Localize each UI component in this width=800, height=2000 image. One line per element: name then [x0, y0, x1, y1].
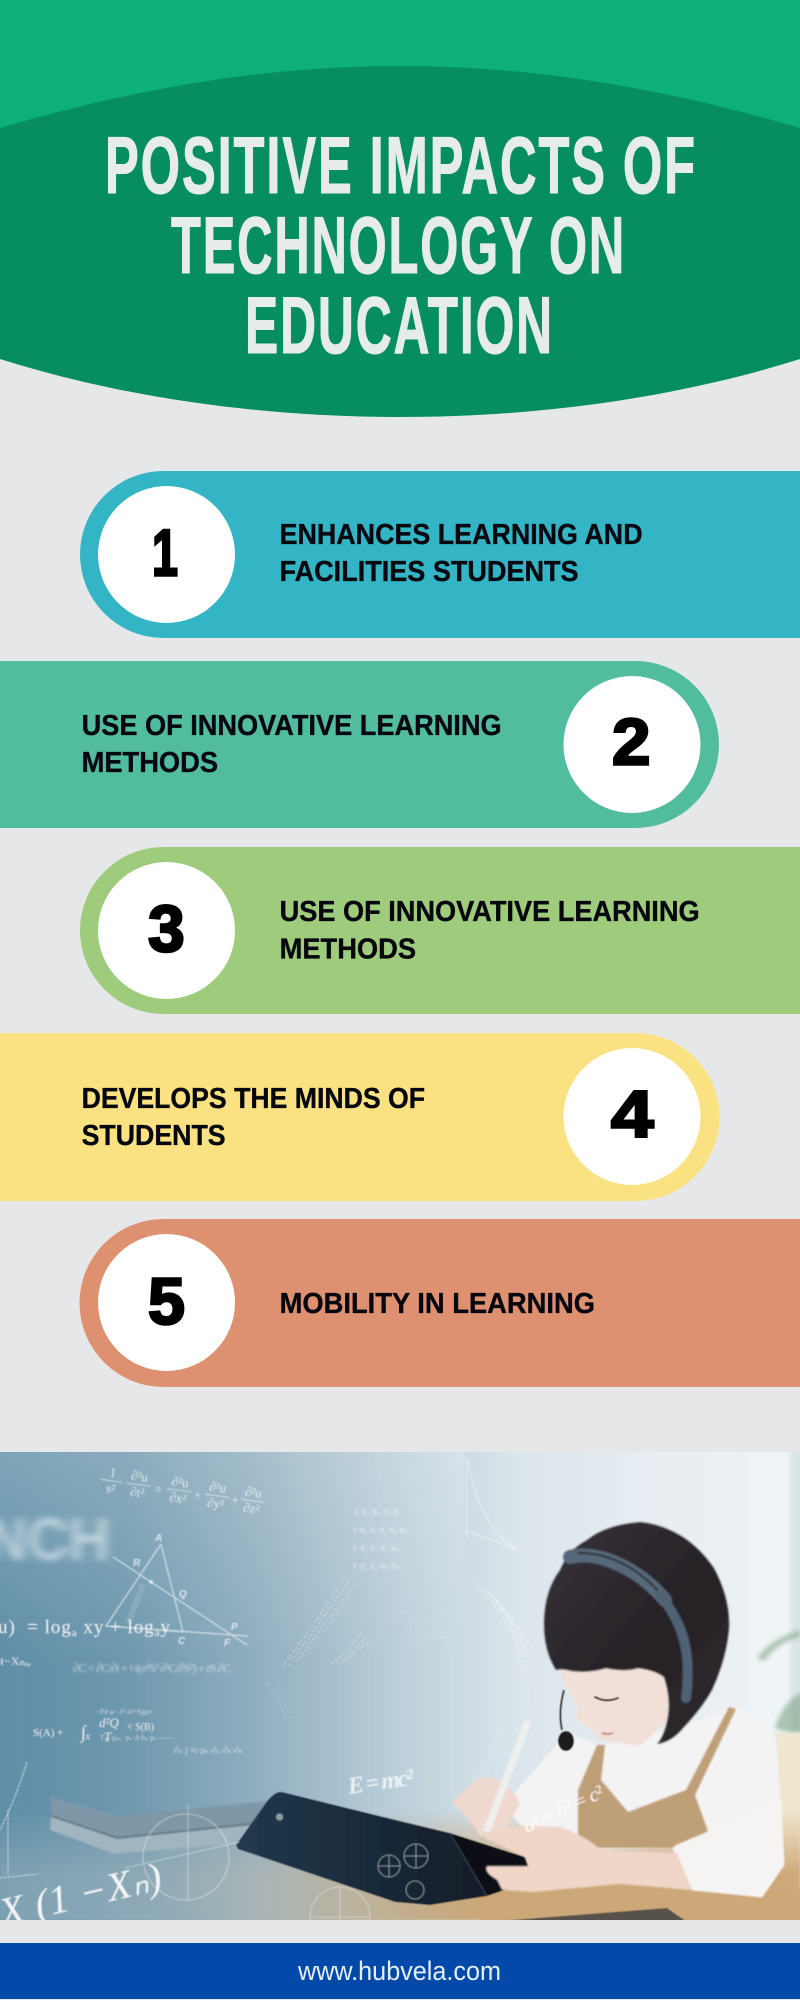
maths overlay: triangle diagram: A [154, 1533, 162, 1544]
item 5 panel: MOBILITY IN LEARNING [280, 1288, 595, 1320]
item 2 panel [0, 661, 719, 828]
maths overlay: integral formula: < S(B) [127, 1722, 154, 1733]
girl torso and sleeves [505, 1706, 784, 1897]
item 3 panel: 3 [148, 892, 185, 966]
tablet case [236, 1792, 534, 1905]
maths overlay: triangle diagram: P [231, 1622, 238, 1633]
maths overlay: small formula rows: Y·θ₁·Xᵢ·θ₁·Xₙ·θᵤ [352, 1526, 407, 1535]
girl face [561, 1668, 670, 1746]
plant [757, 1630, 800, 1732]
maths overlay: wave equation: ∂t² [129, 1484, 145, 1501]
maths overlay: integral formula: S(A) + [33, 1727, 63, 1739]
maths overlay: wave equation: ∂y² [206, 1494, 225, 1512]
maths overlay: small formula rows: ∂C = ∂C/∂t + ½(σ²S² ∂²C/∂S²) + rS ∂C [73, 1661, 231, 1675]
particle swarms [267, 1578, 532, 1785]
maths overlay: wave equation: ∂z² [242, 1500, 260, 1517]
maths overlay: integral formula [33, 1715, 154, 1744]
maths overlay: wave equation: 1 [109, 1465, 117, 1480]
header banner [0, 0, 800, 417]
title: EDUCATION [245, 281, 554, 371]
item 5 panel [80, 1219, 800, 1387]
header dark green lens [0, 66, 800, 417]
maths overlay: triangle diagram: C [178, 1636, 186, 1647]
item 4 panel [0, 1033, 720, 1201]
item 1 panel: 1 [152, 516, 178, 590]
maths overlay: wave equation: ∂²u [244, 1484, 263, 1501]
maths overlay: wave equation [100, 1468, 264, 1514]
item 4 panel: DEVELOPS THE MINDS OF [82, 1083, 425, 1115]
maths overlay: small formula rows: ∂ₖ·∫·½·ρₖ·∂ₖ·∂ₖ·∂ₖ [174, 1745, 243, 1756]
maths overlay: integral formula: ∫ₓ [80, 1722, 91, 1743]
maths overlay: integral formula: d²Q [99, 1715, 119, 1730]
headband [570, 1553, 688, 1698]
left hand [452, 1777, 520, 1836]
maths overlay: wave equation: ∂²u [171, 1473, 190, 1491]
maths overlay: small formula rows: −Pd·φ− ∂²·∂t²·Sgpσ [96, 1708, 152, 1716]
table [0, 1810, 800, 1925]
photo background [0, 1445, 800, 1925]
maths overlay: logarithm formula: u) = log [0, 1617, 71, 1638]
maths overlay: integral formula: T [104, 1729, 112, 1744]
header light green band [0, 0, 800, 242]
website address: www.hubvela.com [297, 1956, 501, 1986]
maths overlay: logarithm formula: a [72, 1627, 77, 1639]
girl hair [544, 1522, 729, 1744]
maths overlay: wave equation: + [193, 1487, 202, 1502]
maths overlay: wave equation: s² [105, 1480, 116, 1496]
maths overlay: logistic formula: X (1 −Xₙ) [0, 1854, 166, 1935]
maths overlay: small formula rows: Y·θ₂·X₂·θₙ·Xₙ [352, 1562, 400, 1571]
maths overlay: graph left [0, 1762, 38, 1878]
maths overlay: wave equation: ∂²u [130, 1468, 150, 1485]
maths overlay: small formula rows: Y·θ₂·X₁·θ₂·Xₙ [352, 1544, 399, 1553]
right sleeve [673, 1814, 785, 1898]
item 1 panel: ENHANCES LEARNING AND [280, 519, 643, 551]
chair [774, 1732, 800, 1890]
girl eye [595, 1697, 618, 1700]
maths overlay: circle diagram on table [125, 1805, 240, 1900]
item 4 panel: STUDENTS [82, 1120, 226, 1152]
item 2 panel: 2 [612, 704, 650, 778]
maths overlay: wave equation: ∂²u [209, 1479, 228, 1496]
item 3 panel: USE OF INNOVATIVE LEARNING [280, 896, 700, 928]
maths overlay: triangle diagram: R [133, 1558, 141, 1569]
item 5 panel: 5 [148, 1264, 185, 1338]
maths overlay: pie diagrams on tablet [309, 1842, 430, 1920]
maths overlay: graph upper right [465, 1458, 518, 1550]
maths overlay: Pythagoras: a² + b² = c² [520, 1781, 608, 1838]
item 1 panel: FACILITIES STUDENTS [280, 556, 579, 588]
maths overlay: wave equation: ∂x² [169, 1489, 188, 1506]
footer bar [0, 1943, 800, 1999]
maths overlay: triangle diagram: F [224, 1638, 231, 1649]
maths overlay: wave equation: + [231, 1492, 240, 1508]
girl mouth [602, 1733, 613, 1734]
maths overlay: logarithm formula: a [155, 1627, 160, 1639]
headset microphone [558, 1690, 574, 1751]
right hand and forearm [483, 1826, 692, 1892]
maths overlay: small formula rows: Tₙₖ·pₖₖ ·pₖ·Δ·bₖ·pₖ —— [100, 1734, 174, 1742]
photo: girl using tablet with floating maths [0, 1445, 800, 1947]
maths overlay: wave equation: = [153, 1481, 163, 1497]
maths overlay: E = mc²: E = mc² [345, 1765, 416, 1800]
item 3 panel [80, 847, 800, 1014]
books [50, 1797, 268, 1854]
maths overlay: small formula rows: Y·θ₁·Xₖ·Yᵢ·θᵤ [354, 1508, 400, 1517]
item 2 panel: USE OF INNOVATIVE LEARNING [82, 710, 502, 742]
item 4 panel: 4 [611, 1076, 654, 1150]
item 2 panel: METHODS [82, 747, 218, 779]
girl [452, 1522, 784, 1897]
item 1 panel [80, 471, 800, 638]
girl apron [578, 1707, 736, 1848]
maths overlay: logarithm formula: y [160, 1617, 170, 1638]
maths overlay: small formula rows [0, 1508, 407, 1756]
maths overlay: small formula rows: t−Xₙₐ, [0, 1654, 31, 1668]
stylus [487, 1724, 527, 1830]
maths overlay: triangle diagram: Q [179, 1589, 187, 1600]
maths overlay: logarithm formula: xy + log [78, 1617, 154, 1638]
title [105, 121, 697, 371]
item 3 panel: METHODS [280, 934, 416, 966]
maths overlay: triangle diagram [106, 1533, 248, 1649]
